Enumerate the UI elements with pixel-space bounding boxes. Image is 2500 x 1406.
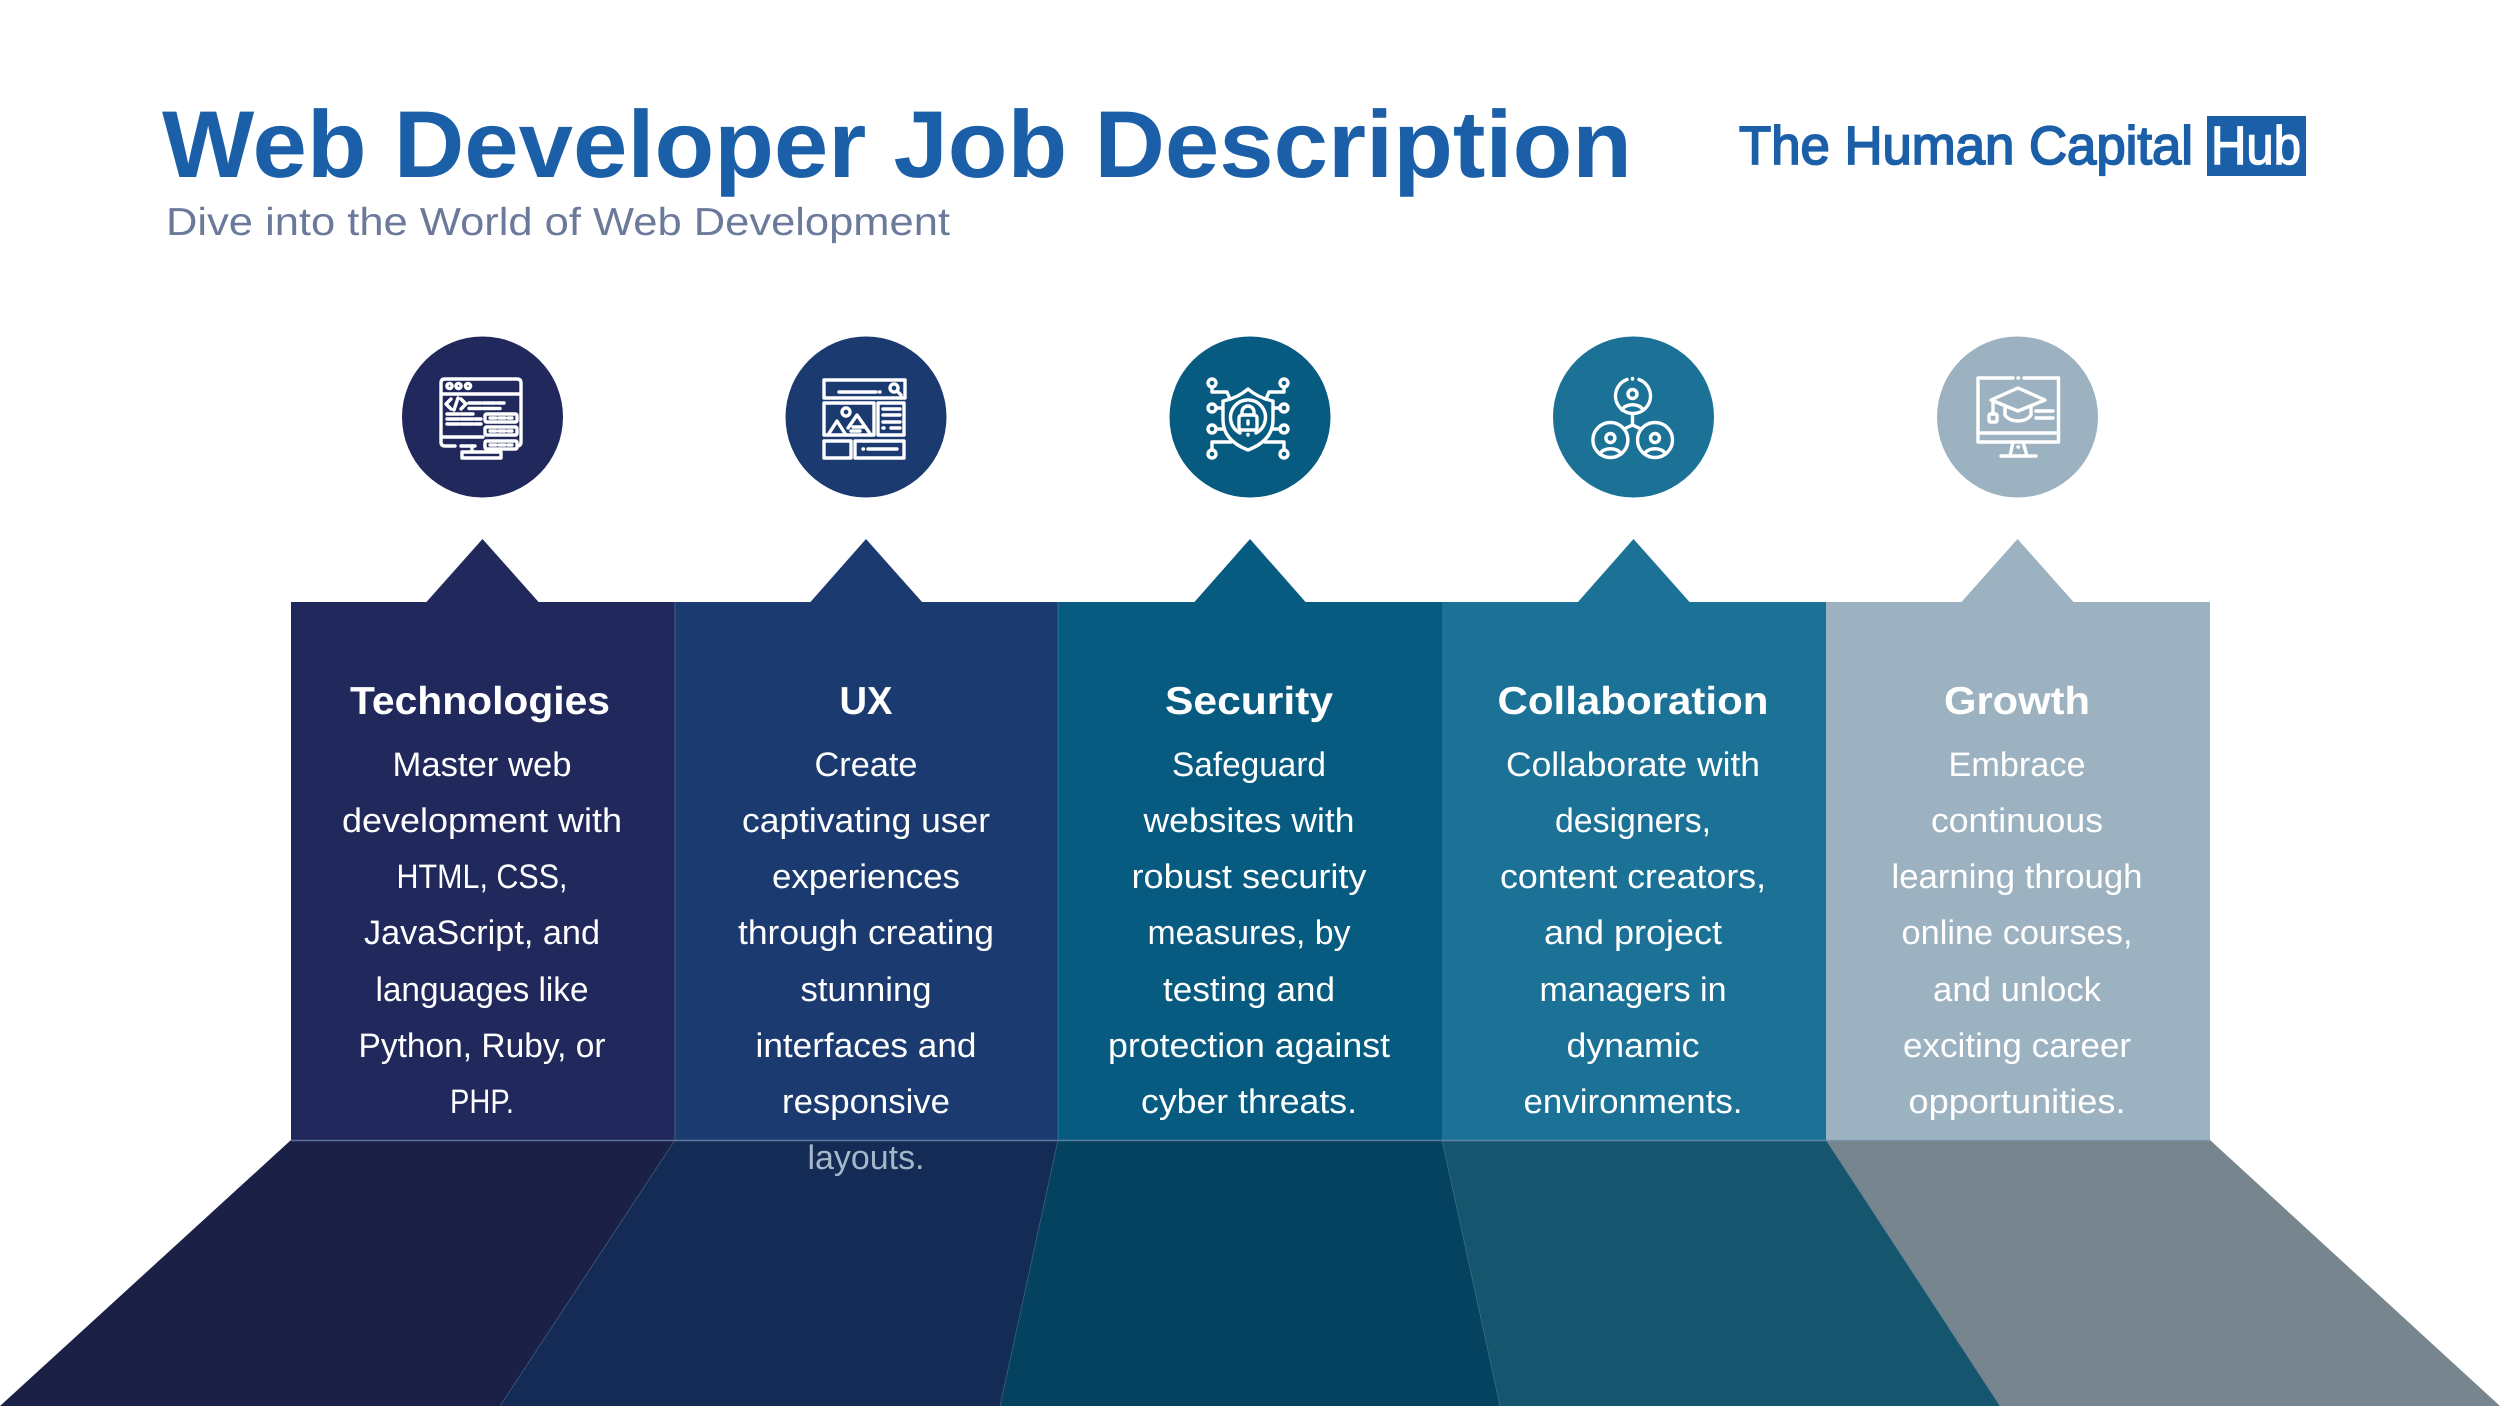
logo: The Human Capital Hub: Hub <box>2211 116 2301 176</box>
body text: JavaScript, and <box>364 914 600 952</box>
body text: captivating user <box>742 802 990 840</box>
body text: managers in <box>1540 971 1726 1009</box>
heading: Collaboration <box>1498 680 1768 723</box>
body text: development with <box>342 802 622 840</box>
heading: Security <box>1165 680 1333 723</box>
body text: Create <box>814 746 918 784</box>
body text: PHP. <box>450 1083 514 1121</box>
column: Security <box>1000 336 1500 1406</box>
icon circle: shield with lock <box>1170 336 1330 498</box>
heading: Technologies <box>350 680 610 723</box>
body text: responsive <box>782 1083 950 1121</box>
body text: exciting career <box>1903 1027 2131 1065</box>
body text <box>342 746 622 1121</box>
pointer <box>1961 539 2074 602</box>
title: Web Developer Job Description <box>162 92 1632 198</box>
heading: Growth <box>1944 680 2090 723</box>
body text: Safeguard <box>1172 746 1326 784</box>
body text: robust security <box>1132 858 1366 896</box>
body text: experiences <box>772 858 960 896</box>
column: UX <box>500 336 1058 1406</box>
icon circle: graduation cap on monitor <box>1937 336 2098 498</box>
floor shadow <box>1442 1140 2000 1406</box>
body text: measures, by <box>1148 914 1350 952</box>
body text: online courses, <box>1902 914 2132 952</box>
body text: opportunities. <box>1908 1083 2126 1121</box>
column: Collaboration <box>1442 336 2000 1406</box>
logo: The Human Capital Hub: The Human Capital <box>1739 116 2193 176</box>
body text: interfaces and <box>756 1027 976 1065</box>
heading: UX <box>840 680 892 723</box>
body text <box>1108 746 1391 1121</box>
floor shadow <box>500 1140 1058 1406</box>
pointer <box>810 539 922 602</box>
body text: HTML, CSS, <box>396 858 568 896</box>
body text: Collaborate with <box>1506 746 1760 784</box>
body text <box>1892 746 2142 1121</box>
body text: continuous <box>1931 802 2103 840</box>
card <box>1058 602 1442 1140</box>
body text: cyber threats. <box>1141 1083 1357 1121</box>
body text: stunning <box>800 971 932 1009</box>
body text: Python, Ruby, or <box>358 1027 606 1065</box>
body text: testing and <box>1163 971 1335 1009</box>
body text: and project <box>1544 914 1723 952</box>
pointer <box>426 539 539 602</box>
body text: content creators, <box>1500 858 1766 896</box>
icon circle: three connected people <box>1553 336 1714 498</box>
card <box>1442 602 1826 1140</box>
body text: layouts. <box>808 1139 924 1177</box>
body text: languages like <box>376 971 588 1009</box>
floor shadow <box>0 1140 675 1406</box>
pointer <box>1578 539 1690 602</box>
body text: dynamic <box>1566 1027 1700 1065</box>
floor shadow <box>1826 1140 2500 1406</box>
body text: learning through <box>1892 858 2142 896</box>
card <box>675 602 1058 1140</box>
card <box>1826 602 2210 1140</box>
card <box>291 602 675 1140</box>
body text <box>738 746 994 1177</box>
floor shadow <box>1000 1140 1500 1406</box>
icon circle: code window and database <box>402 336 563 498</box>
body text: Embrace <box>1948 746 2086 784</box>
subtitle: Dive into the World of Web Development <box>166 201 950 244</box>
body text <box>1500 746 1766 1121</box>
icon circle: web layout <box>786 336 946 498</box>
column: Technologies <box>0 336 675 1406</box>
body text: websites with <box>1142 802 1354 840</box>
body text: environments. <box>1524 1083 1742 1121</box>
column: Growth <box>1826 336 2500 1406</box>
body text: designers, <box>1555 802 1711 840</box>
body text: protection against <box>1108 1027 1391 1065</box>
body text: and unlock <box>1933 971 2102 1009</box>
body text: Master web <box>392 746 572 784</box>
pointer <box>1194 539 1306 602</box>
body text: through creating <box>738 914 994 952</box>
